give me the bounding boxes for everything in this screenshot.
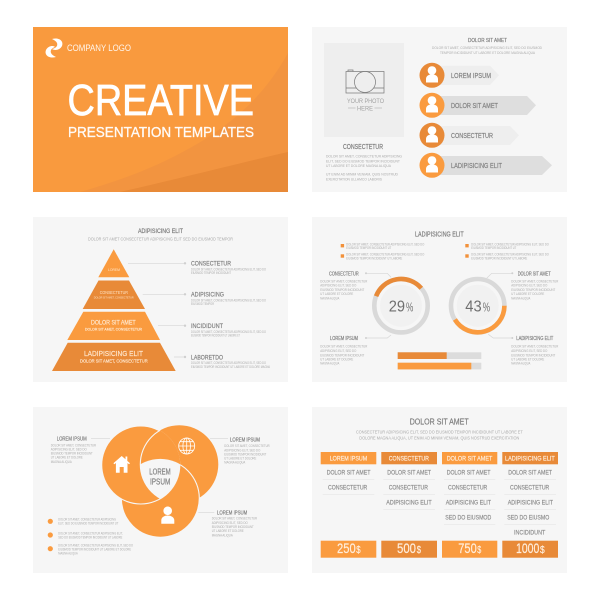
pricing column: 500$: CONSECTETUR <box>389 456 429 463</box>
callout: ladipisicing elit: LADIPISICING ELIT <box>516 336 553 342</box>
callout: laboretdo <box>174 354 270 369</box>
callout: lorem ipsum: EIUSMOD TEMPOR INCIDIDUNT <box>320 353 365 357</box>
callout: top right: UT LABORE ET DOLORE <box>224 456 257 460</box>
callout: dolor sit amet <box>487 271 558 300</box>
callout: lorem ipsum: DOLOR SIT AMET, CONSECTETUR <box>320 345 367 349</box>
callout: top left <box>51 437 110 464</box>
panel: venn diagram slide <box>33 407 288 573</box>
bullet list: MAGNA ALIQUA <box>58 551 78 555</box>
icon: person <box>161 506 174 524</box>
heading: dolor sit amet: DOLOR SIT AMET <box>410 417 469 426</box>
callout: adipisicing: EIUSMOD TEMPOR <box>191 302 214 306</box>
company logo text: COMPANY LOGO <box>67 43 131 54</box>
panel: cover slide <box>33 27 288 192</box>
bullet list: DOLOR SIT AMET, CONSECTETUR ADIPISICING <box>58 517 116 521</box>
donut chart: 43%: 43 <box>465 299 482 316</box>
callout: consectetur <box>320 271 391 300</box>
bullet list: SED DO EIUSMOD TEMPOR INCIDIDUNT UT LABORE <box>58 535 123 539</box>
text block: consectetur: DOLOR SIT AMET, CONSECTETUR ADIPISICING <box>326 154 402 158</box>
pyramid level 2: DOLOR SIT AMET, CONSECTETUR <box>94 296 134 300</box>
pricing column: 750$: ADIPISICING ELIT <box>446 499 491 506</box>
panel: pyramid slide <box>33 217 288 382</box>
callout: dolor sit amet: ADIPISICING ELIT, SED DO <box>511 284 547 288</box>
list item: ladipisicing elit: LADIPISICING ELIT <box>451 161 502 170</box>
pricing column: 1000$: CONSECTETUR <box>510 484 550 491</box>
pyramid level 2: CONSECTETUR <box>100 290 128 295</box>
list item: ladipisicing elit <box>420 153 552 178</box>
pyramid level 3: DOLOR SIT AMET <box>91 320 136 327</box>
bullet list <box>48 517 133 555</box>
callout: consectetur <box>128 261 266 275</box>
pricing column: 1000$: SED DO EIUSMO <box>507 515 549 522</box>
center label: LOREM <box>149 468 171 477</box>
pricing column: 1000$: DOLOR SIT AMET <box>508 469 552 476</box>
pyramid level 2 <box>83 280 145 309</box>
pricing column: 250$: $ <box>356 545 361 556</box>
callout: bottom right: EIUSMOD TEMPOR INCIDIDUNT <box>212 525 254 529</box>
text block: consectetur <box>326 144 402 181</box>
callout: lorem ipsum <box>320 335 391 366</box>
pyramid level 3 <box>67 312 160 340</box>
bullet list: DOLOR SIT AMET, CONSECTETUR ADIPISICING ELIT, SED DO <box>471 242 549 246</box>
callout: incididunt: DOLOR SIT AMET, CONSECTETUR ADIPISICING ELIT, SED DO <box>191 330 266 334</box>
callout: top left: ADIPISICING ELIT, SED DO <box>51 448 87 452</box>
callout: consectetur: DOLOR SIT AMET, CONSECTETUR <box>320 279 367 283</box>
bullet list: EIUSMOD TEMPOR INCIDIDUNT UT LABORE <box>471 256 528 260</box>
bullet list: EIUSMOD TEMPOR INCIDIDUNT UT <box>346 246 392 250</box>
pyramid level 4 <box>52 343 176 371</box>
progress bars <box>398 352 481 369</box>
pyramid level 1: LOREM <box>108 267 120 272</box>
pricing column: 500$: ADIPISICING ELIT <box>386 499 432 506</box>
donut chart: 29%: % <box>406 300 414 315</box>
text block: consectetur: UT ENIM AD MINIM VENIAM, QUIS NOSTRUD <box>326 172 398 176</box>
panel: donut charts slide <box>312 217 567 382</box>
text block: consectetur: ELIT, SED DO EIUSMOD TEMPOR INCIDIDUNT <box>326 159 401 163</box>
pricing column: 500$: 500 <box>397 540 416 556</box>
bullet list: EIUSMOD TEMPOR INCIDIDUNT UT <box>471 246 517 250</box>
pricing column: 1000$: 1000 <box>516 540 539 556</box>
callout: dolor sit amet: DOLOR SIT AMET <box>518 271 551 277</box>
bullet list: EIUSMOD TEMPOR INCIDIDUNT UT LABORE <box>346 256 403 260</box>
callout: top right: DOLOR SIT AMET, CONSECTETUR <box>224 444 270 448</box>
list item: dolor sit amet: DOLOR SIT AMET <box>451 101 498 110</box>
list item: dolor sit amet <box>420 93 536 118</box>
callout: laboretdo: EIUSMOD TEMPOR INCIDIDUNT UT LABORE ET DOLORE MAGNA <box>191 365 270 369</box>
heading: dolor sit amet: DOLORE MAGNA ALIQUA, UT ENIM AD MINIM VENIAM, QUIS NOSTRUD EXERCITATION <box>359 435 519 440</box>
text block: consectetur: UT LABORE ET DOLORE MAGNA ALIQUA <box>326 164 391 168</box>
pricing column: 750$: DOLOR SIT AMET <box>447 456 492 463</box>
pricing column: 250$: CONSECTETUR <box>328 484 368 491</box>
heading: dolor sit amet: DOLOR SIT AMET, CONSECTETUR ADIPISICING ELIT, SED DO EIUSMOD <box>432 46 542 50</box>
callout: consectetur: MAGNA ALIQUA <box>320 296 340 300</box>
pricing column: 1000$: INCIDIDUNT <box>514 530 545 537</box>
bullet list: DOLOR SIT AMET, CONSECTETUR ADIPISICING ELIT, SED DO <box>58 543 133 547</box>
callout: incididunt <box>158 323 266 338</box>
callout: consectetur: CONSECTETUR <box>191 261 231 268</box>
callout: consectetur: ADIPISICING ELIT, SED DO <box>320 284 356 288</box>
bullet list <box>341 242 549 260</box>
callout: dolor sit amet: EIUSMOD TEMPOR INCIDIDUNT <box>511 288 556 292</box>
callout: ladipisicing elit: EIUSMOD TEMPOR INCIDIDUNT <box>511 353 556 357</box>
pricing column: 1000$: $ <box>540 545 545 556</box>
pricing column: 750$: $ <box>477 545 482 556</box>
pricing column: 1000$ <box>502 452 558 558</box>
photo placeholder <box>324 43 404 137</box>
heading: adipisicing elit: DOLOR SIT AMET CONSECTETUR ADIPISICING ELIT SED DO EIUSMOD TEMPOR <box>88 237 233 242</box>
callout: lorem ipsum: ADIPISICING ELIT, SED DO <box>320 349 356 353</box>
callout: top left: DOLOR SIT AMET, CONSECTETUR <box>51 444 96 448</box>
panel: pricing table slide <box>312 407 567 573</box>
pyramid level 4: LADIPISICING ELIT <box>84 349 143 358</box>
pricing column: 1000$: LADIPISICING ELIT <box>505 456 555 463</box>
pricing column: 250$: LOREM IPSUM <box>330 456 367 463</box>
callout: ladipisicing elit <box>488 334 558 366</box>
callout: incididunt: INCIDIDUNT <box>191 323 223 330</box>
callout: consectetur: DOLOR SIT AMET, CONSECTETUR ADIPISICING ELIT, SED DO <box>191 267 266 271</box>
title: CREATIVE <box>68 76 254 125</box>
callout: consectetur: EIUSMOD TEMPOR INCIDIDUNT <box>191 271 231 275</box>
callout: dolor sit amet: DOLOR SIT AMET, CONSECTETUR <box>511 279 558 283</box>
text block: consectetur: EXERCITATION ULLAMCO LABORIS <box>326 177 382 181</box>
panel: photo and list slide <box>312 27 567 192</box>
callout: top left: EIUSMOD TEMPOR INCIDIDUNT <box>51 452 93 456</box>
callout: bottom right: ADIPISICING ELIT, SED DO <box>212 521 248 525</box>
callout: consectetur: UT LABORE ET DOLORE <box>320 292 354 296</box>
bullet list: ELIT, SED DO EIUSMOD TEMPOR INCIDIDUNT UT <box>58 521 119 525</box>
heading: dolor sit amet <box>432 38 542 55</box>
pricing column: 750$: 750 <box>458 540 477 556</box>
callout: lorem ipsum: UT LABORE ET DOLORE <box>320 357 354 361</box>
callout: top left: LOREM IPSUM <box>57 437 87 443</box>
text block: consectetur: CONSECTETUR <box>343 144 383 151</box>
heading: dolor sit amet: TEMPOR INCIDIDUNT UT LABORE ET DOLORE MAGNA ALIQUA <box>440 51 535 55</box>
pricing column: 250$: DOLOR SIT AMET <box>327 469 370 476</box>
bullet list: DOLOR SIT AMET, CONSECTETUR ADIPISICING ELIT, SED DO <box>346 242 424 246</box>
callout: laboretdo: LABORETDO <box>191 354 223 361</box>
pricing column: 500$: CONSECTETUR <box>389 484 428 491</box>
center label: IPSUM <box>150 477 171 486</box>
heading: dolor sit amet: DOLOR SIT AMET <box>468 38 507 44</box>
heading: dolor sit amet: CONSECTETUR ADIPISICING ELIT, SED DO EIUSMOD TEMPOR INCIDIDUNT UT LABORE ET <box>356 429 523 434</box>
pricing column: 500$: DOLOR SIT AMET <box>387 469 431 476</box>
callout: dolor sit amet: UT LABORE ET DOLORE <box>511 292 545 296</box>
callout: laboretdo: DOLOR SIT AMET, CONSECTETUR ADIPISICING ELIT, SED DO <box>191 361 266 365</box>
pricing column: 1000$: ADIPISICING ELIT <box>508 499 553 506</box>
pricing column: 500$: $ <box>417 545 421 556</box>
callout: top left: MAGNA ALIQUA <box>51 460 72 464</box>
icon: camera <box>346 70 384 93</box>
callout: top right <box>210 438 270 465</box>
pricing column: 250$: 250 <box>337 540 356 556</box>
callout: dolor sit amet: MAGNA ALIQUA <box>511 296 531 300</box>
photo caption <box>347 98 384 112</box>
callout: top right: EIUSMOD TEMPOR INCIDIDUNT <box>224 452 267 456</box>
photo caption: HERE <box>357 106 373 112</box>
icon: house <box>113 456 130 473</box>
icon: company logo mark <box>46 38 62 58</box>
callout: adipisicing <box>143 292 266 306</box>
pricing column: 750$: CONSECTETUR <box>448 484 488 491</box>
pricing column: 250$ <box>321 452 376 558</box>
callout: adipisicing: ADIPISICING <box>191 292 224 299</box>
callout: incididunt: EIUSMOD TEMPOR INCIDIDUNT UT LABORE ET <box>191 334 240 338</box>
bullet list: EIUSMOD TEMPOR INCIDIDUNT UT LABORE ET DOLORE <box>58 547 131 551</box>
venn diagram <box>102 425 218 538</box>
center label <box>149 468 171 486</box>
donut chart: 43%: % <box>483 300 490 315</box>
callout: bottom right: LOREM IPSUM <box>217 510 247 516</box>
callout: top left: UT LABORE ET DOLORE <box>51 456 83 460</box>
donut chart: 29%: 29 <box>389 299 405 316</box>
callout: ladipisicing elit: DOLOR SIT AMET, CONSECTETUR <box>511 345 558 349</box>
callout: bottom right: MAGNA ALIQUA <box>212 533 233 537</box>
callout: lorem ipsum: LOREM IPSUM <box>330 336 358 342</box>
callout: bottom right <box>198 510 257 537</box>
callout: ladipisicing elit: ADIPISICING ELIT, SED DO <box>511 349 547 353</box>
list item: lorem ipsum <box>420 63 499 88</box>
pyramid level 1 <box>98 249 129 277</box>
callout: consectetur: CONSECTETUR <box>329 271 359 277</box>
callout: top right: MAGNA ALIQUA <box>224 461 246 465</box>
list item: lorem ipsum: LOREM IPSUM <box>451 71 491 80</box>
callout: bottom right: UT LABORE ET DOLORE <box>212 529 244 533</box>
callout: bottom right: DOLOR SIT AMET, CONSECTETUR <box>212 517 257 521</box>
bullet list: DOLOR SIT AMET, CONSECTETUR ADIPISICING ELIT, SED DO <box>346 253 424 257</box>
bullet list: DOLOR SIT AMET, CONSECTETUR ADIPISICING ELIT, SED DO <box>471 253 549 257</box>
list item: consectetur <box>420 123 519 148</box>
photo caption: YOUR PHOTO <box>347 98 384 105</box>
bullet list: DOLOR SIT AMET, CONSECTETUR ADIPISICING ELIT, <box>58 531 123 535</box>
pyramid level 4: DOLOR SIT AMET, CONSECTETUR <box>80 359 148 364</box>
donut chart: 29% <box>374 279 428 332</box>
callout: ladipisicing elit: MAGNA ALIQUA <box>511 362 531 366</box>
icon: globe <box>179 438 195 454</box>
callout: adipisicing: DOLOR SIT AMET, CONSECTETUR ADIPISICING ELIT, SED DO <box>191 298 266 302</box>
list item: consectetur: CONSECTETUR <box>451 131 493 140</box>
heading: dolor sit amet <box>356 417 523 440</box>
callout: top right: ADIPISICING ELIT, SED DO <box>224 448 260 452</box>
subtitle: PRESENTATION TEMPLATES <box>68 124 254 141</box>
donut chart: 43% <box>451 279 504 332</box>
pyramid level 3: DOLOR SIT AMET, CONSECTETUR <box>85 327 142 332</box>
pricing column: 500$ <box>381 452 437 558</box>
pricing column: 750$: DOLOR SIT AMET <box>447 469 490 476</box>
callout: lorem ipsum: MAGNA ALIQUA <box>320 362 340 366</box>
heading: adipisicing elit <box>88 229 233 242</box>
heading: ladipisicing elit: LADIPISICING ELIT <box>415 232 464 239</box>
callout: top right: LOREM IPSUM <box>230 438 260 444</box>
pricing column: 750$ <box>442 452 497 558</box>
callout: ladipisicing elit: UT LABORE ET DOLORE <box>511 357 545 361</box>
pricing column: 750$: SED DO EIUSMOD <box>445 515 492 522</box>
callout: consectetur: EIUSMOD TEMPOR INCIDIDUNT <box>320 288 365 292</box>
heading: adipisicing elit: ADIPISICING ELIT <box>138 229 183 235</box>
